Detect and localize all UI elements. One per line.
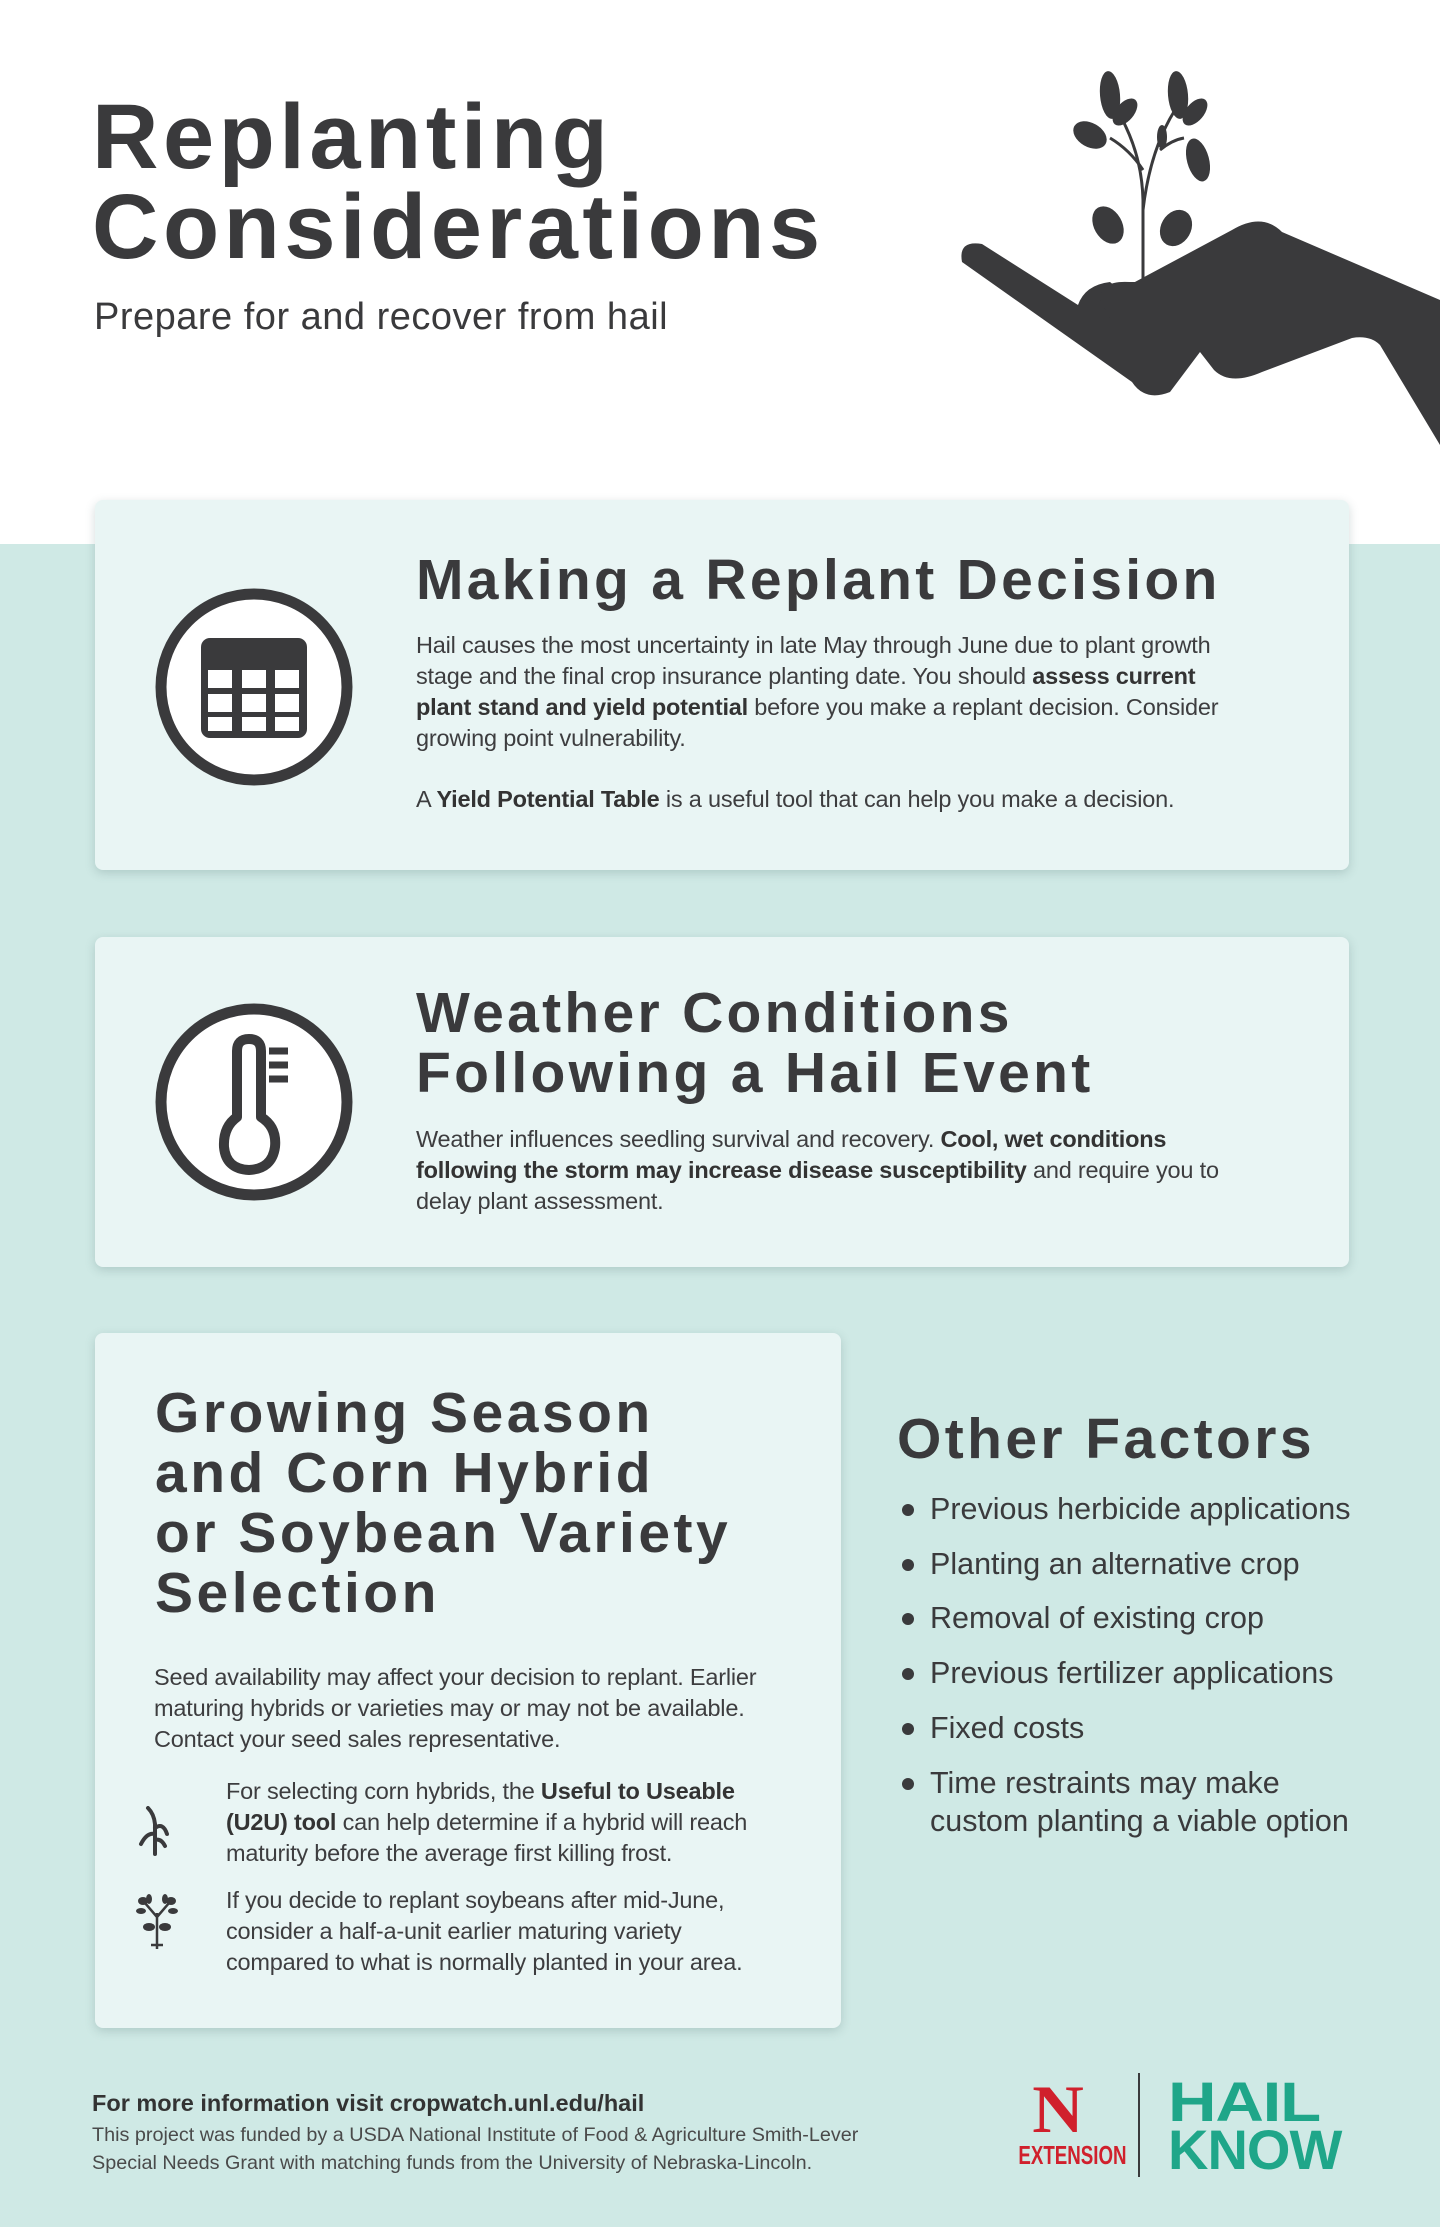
body text: growing point vulnerability.	[416, 725, 686, 751]
text: compared to what is normally planted in your area.	[226, 1949, 742, 1975]
logo: nebraska extension: EXTENSION	[1018, 2140, 1127, 2170]
illustration: hand holding seedling	[961, 71, 1440, 445]
text: consider a half-a-unit earlier maturing variety	[226, 1918, 682, 1944]
logo: nebraska extension: N	[1032, 2071, 1084, 2147]
body text: maturing hybrids or varieties may or may not be available.	[154, 1695, 745, 1721]
footer text: For more information visit cropwatch.unl.edu/hail	[92, 2090, 644, 2116]
heading: Other Factors	[897, 1407, 1315, 1471]
footer text: This project was funded by a USDA National Institute of Food & Agriculture Smith-Lever	[92, 2124, 858, 2146]
panel: growing season	[95, 1333, 841, 2028]
icon: thermometer	[156, 1004, 352, 1200]
heading	[416, 981, 1094, 1105]
body text: following the storm may increase disease susceptibility and require you to	[416, 1157, 1219, 1183]
bullet list: Previous fertilizer applications	[930, 1656, 1333, 1690]
body text: delay plant assessment.	[416, 1188, 664, 1214]
bullet list: Time restraints may make	[930, 1766, 1280, 1800]
body text: plant stand and yield potential before you make a replant decision. Consider	[416, 694, 1218, 720]
text: (U2U) tool can help determine if a hybrid will reach	[226, 1809, 747, 1835]
icon: soybean	[136, 1894, 178, 1949]
text: maturity before the average first killing frost.	[226, 1840, 672, 1866]
subtitle: Prepare for and recover from hail	[94, 296, 668, 338]
bullet list: Fixed costs	[930, 1710, 1084, 1744]
heading: and Corn Hybrid	[155, 1441, 654, 1505]
body text	[416, 1126, 1219, 1214]
title	[92, 86, 825, 278]
bullet list: custom planting a viable option	[930, 1804, 1349, 1838]
footer text: Special Needs Grant with matching funds from the University of Nebraska-Lincoln.	[92, 2152, 812, 2174]
body text: stage and the final crop insurance planting date. You should assess current	[416, 663, 1195, 689]
heading: Following a Hail Event	[416, 1041, 1094, 1105]
body text: Hail causes the most uncertainty in late May through June due to plant growth	[416, 632, 1211, 658]
title: Considerations	[92, 176, 825, 278]
text	[226, 1778, 747, 1866]
body text: Weather influences seedling survival and recovery. Cool, wet conditions	[416, 1126, 1166, 1152]
footer text	[92, 2090, 858, 2174]
text	[226, 1887, 742, 1975]
panel: other factors	[897, 1407, 1350, 1838]
text: For selecting corn hybrids, the Useful to Useable	[226, 1778, 735, 1804]
bullet list	[902, 1492, 1350, 1838]
logo: nebraska extension	[1018, 2071, 1127, 2170]
heading: Growing Season	[155, 1381, 654, 1445]
panel: making a replant decision	[95, 500, 1349, 870]
heading	[155, 1381, 731, 1625]
heading: Weather Conditions	[416, 981, 1013, 1045]
icon: corn	[138, 1806, 170, 1856]
bullet list: Planting an alternative crop	[930, 1546, 1300, 1580]
body text: Seed availability may affect your decision to replant. Earlier	[154, 1664, 756, 1690]
item: soybean	[136, 1887, 742, 1975]
heading: Making a Replant Decision	[416, 548, 1221, 612]
icon: table	[156, 588, 352, 786]
callout text: A Yield Potential Table is a useful tool that can help you make a decision.	[416, 786, 1174, 812]
divider	[1138, 2073, 1140, 2177]
panel: weather conditions	[95, 937, 1349, 1267]
body text	[416, 632, 1218, 751]
text: If you decide to replant soybeans after mid-June,	[226, 1887, 724, 1913]
bullet list: Previous herbicide applications	[930, 1492, 1350, 1526]
logo: hail know: KNOW	[1168, 2118, 1341, 2181]
heading: Selection	[155, 1561, 440, 1625]
item: corn	[138, 1778, 747, 1866]
bullet list: Removal of existing crop	[930, 1601, 1264, 1635]
body text: Contact your seed sales representative.	[154, 1726, 560, 1752]
title: Replanting	[92, 86, 612, 188]
logo: hail know: HAIL	[1168, 2070, 1320, 2133]
logo: hail know	[1168, 2070, 1342, 2181]
heading: or Soybean Variety	[155, 1501, 731, 1565]
body text	[154, 1664, 756, 1752]
